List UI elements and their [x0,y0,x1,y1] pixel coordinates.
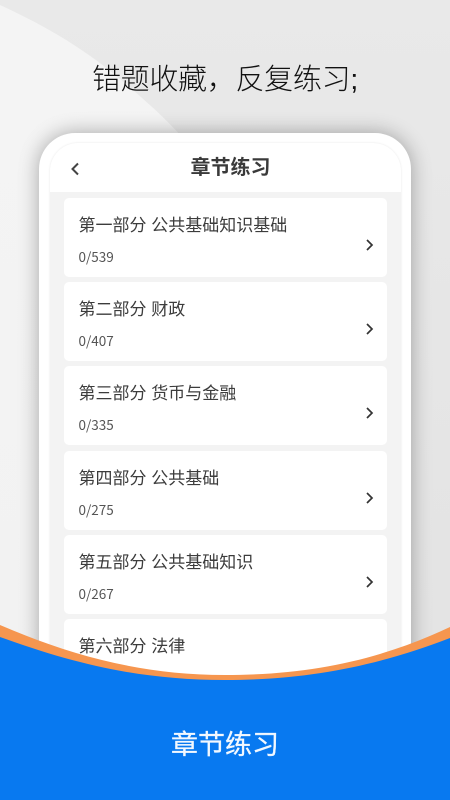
screen title: 章节练习 [190,157,270,179]
list item 4: 第四部分 公共基础 [78,469,219,488]
heading: 错题收藏，反复练习; [92,64,358,96]
list item 1: 第一部分 公共基础知识基础 [78,216,287,235]
icon: back arrow [71,162,79,176]
list item 2 [64,282,387,361]
list item 2: 0/407 [78,330,114,350]
list item 6 [64,619,387,698]
list item 5 [64,535,387,614]
list item 5: 第五部分 公共基础知识 [78,553,253,572]
panel: phone mockup [39,133,411,773]
banner caption: 章节练习 [171,730,279,760]
list item 2: 第二部分 财政 [78,300,185,319]
list item 4: 0/275 [78,499,114,519]
list item 1: 0/539 [78,246,114,266]
panel: phone screen [50,143,401,773]
list item 4 [64,451,387,530]
list item 1 [64,198,387,277]
chapter list [50,192,401,773]
list item 6: 第六部分 法律 [78,637,185,656]
list item 3: 0/335 [78,414,114,434]
list item 3: 第三部分 货币与金融 [78,384,236,403]
list item 5: 0/267 [78,583,114,603]
list item 3 [64,366,387,445]
